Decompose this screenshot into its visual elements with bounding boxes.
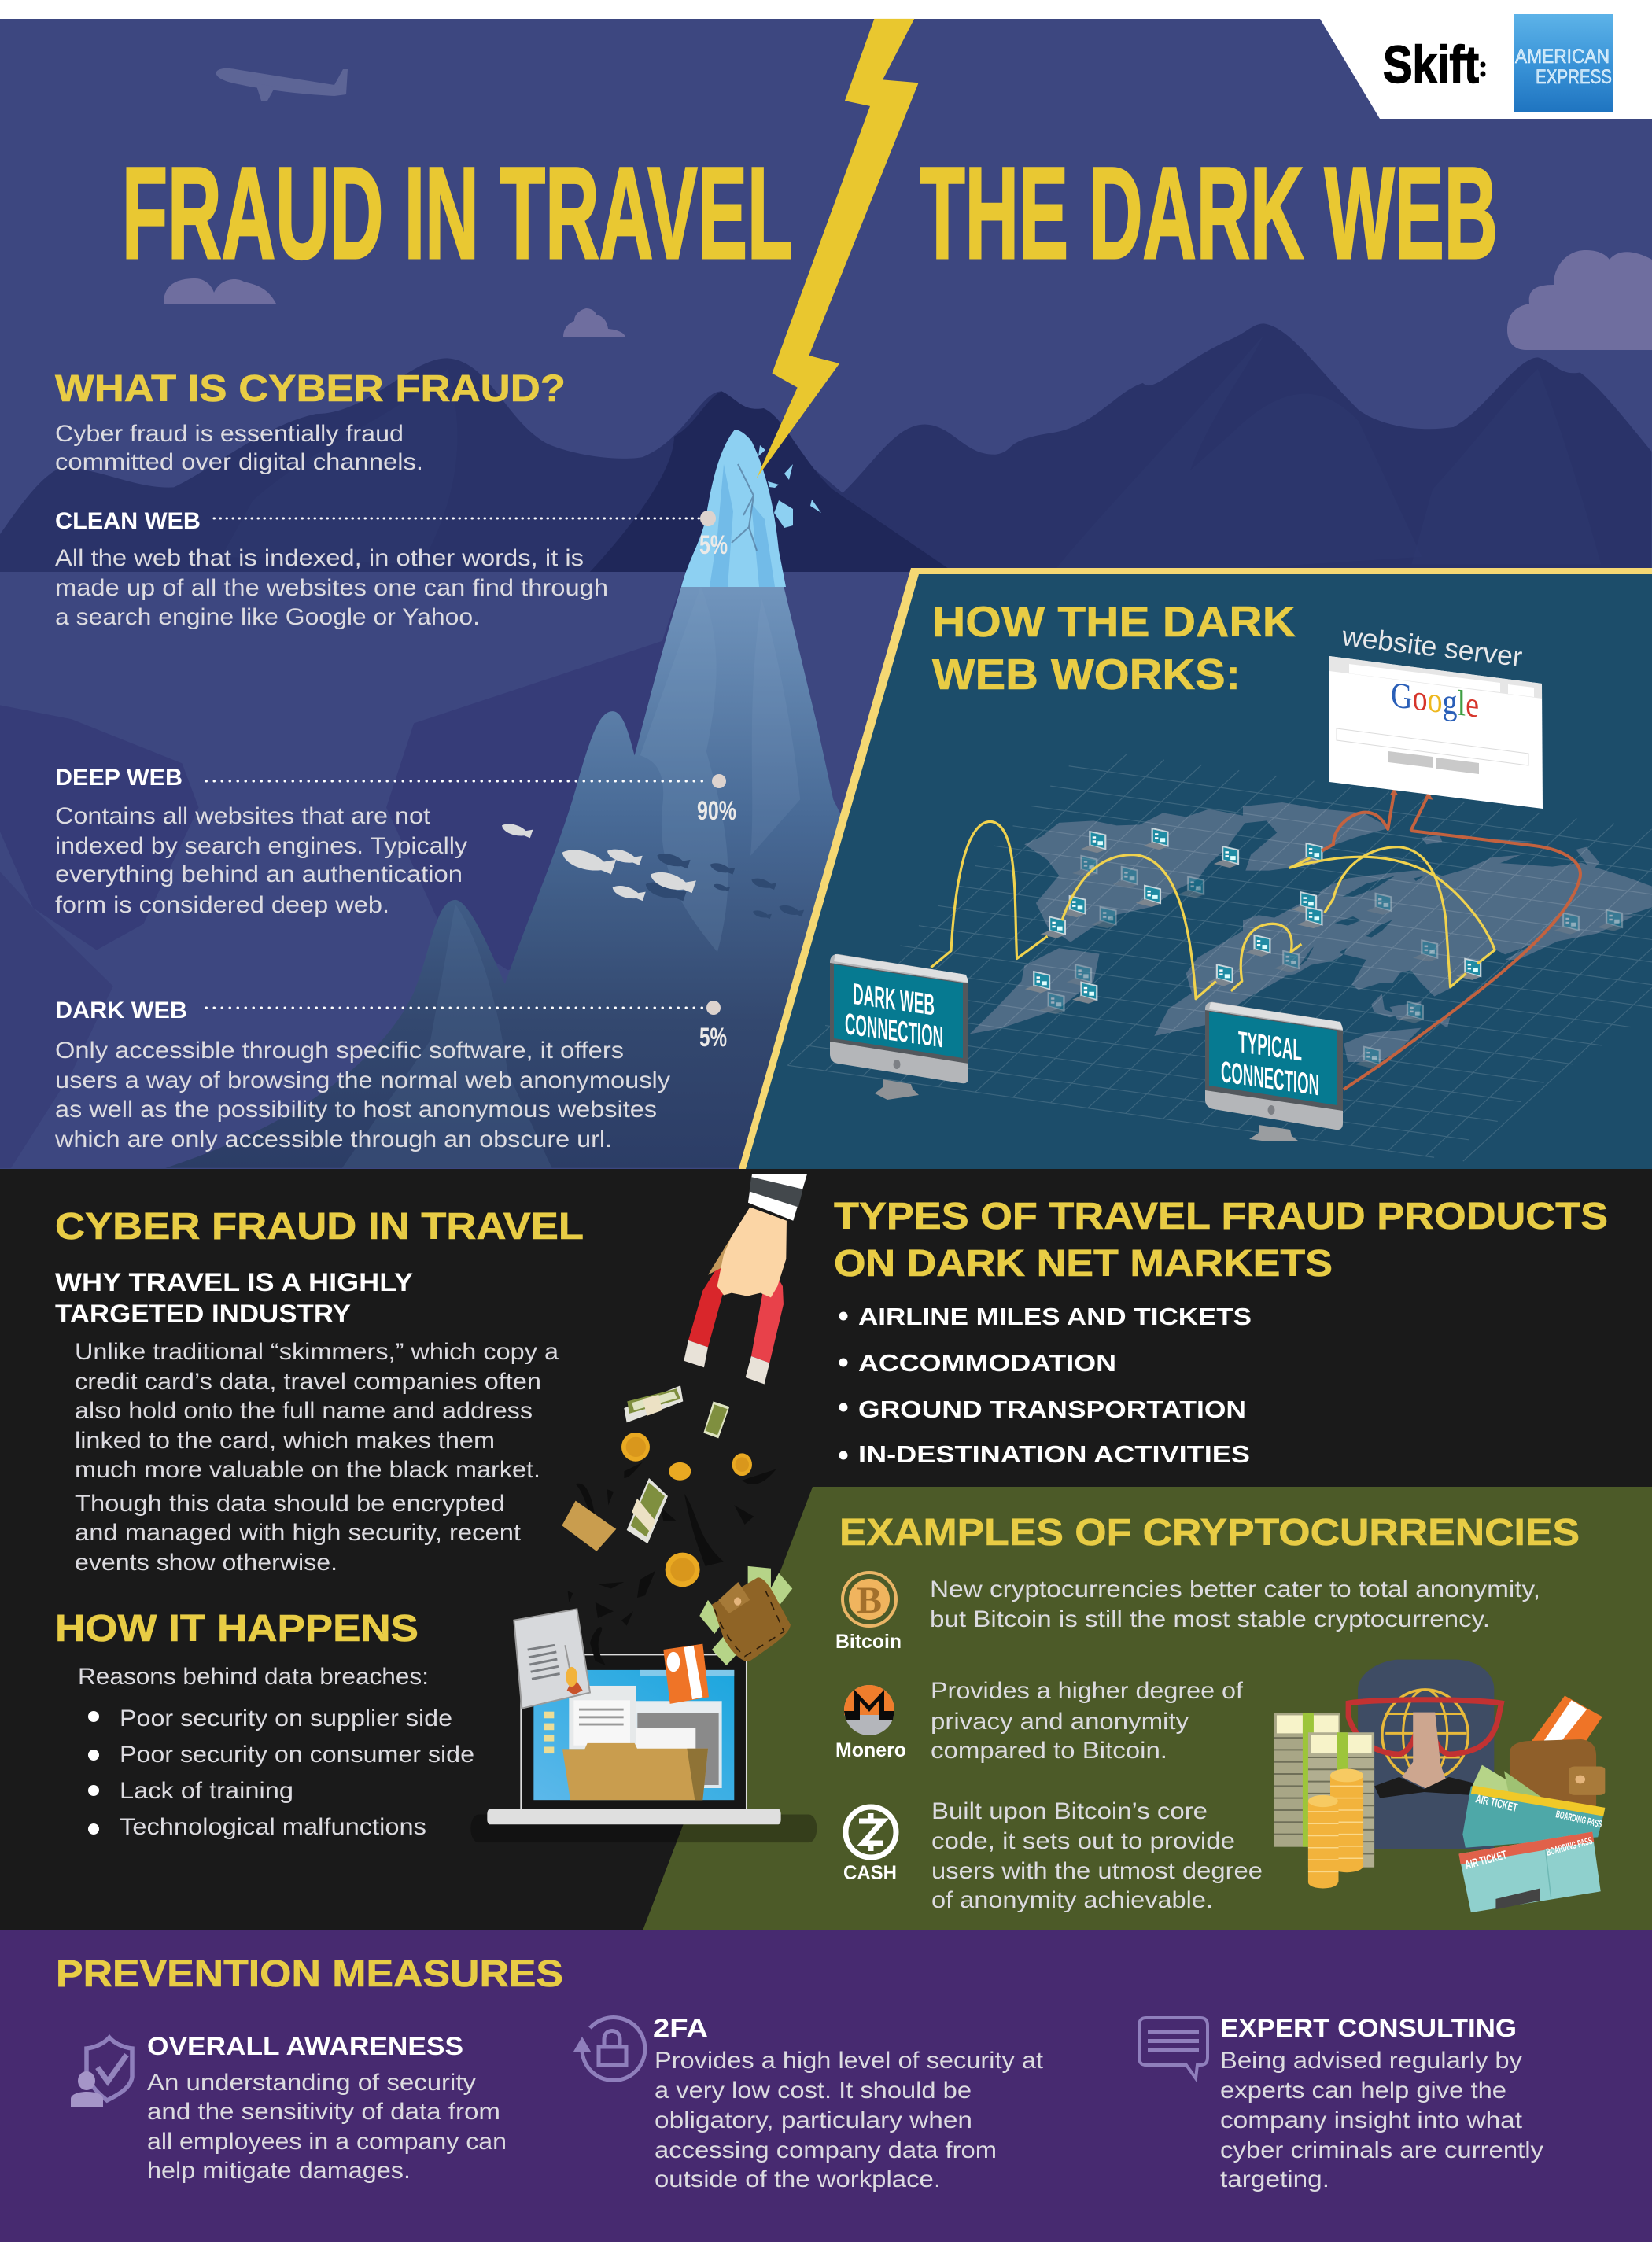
label: deep web xyxy=(55,765,736,826)
subheading: why travel is targeted: WHY TRAVEL IS A HIGHLY xyxy=(55,1268,413,1296)
text: expert consulting: EXPERT CONSULTING xyxy=(1220,2014,1517,2042)
title left: FRAUD IN TRAVEL xyxy=(122,141,793,286)
flying folder xyxy=(562,1501,616,1551)
background mountains xyxy=(0,323,1652,572)
text: clean web description xyxy=(55,545,608,630)
panel: black section xyxy=(0,1169,1652,1930)
list: breach reasons: Poor security on consumer side xyxy=(120,1742,474,1768)
text: zcash description xyxy=(931,1798,1263,1913)
logo: American Express: EXPRESS xyxy=(1536,66,1612,88)
text: clean web description: a search engine like Google or Yahoo. xyxy=(55,604,480,630)
text: why travel description: events show otherwise. xyxy=(75,1550,337,1576)
clouds xyxy=(164,250,1652,350)
text: definition: committed over digital channels. xyxy=(55,449,423,475)
text: monero description: compared to Bitcoin. xyxy=(931,1738,1167,1764)
logo dots xyxy=(1481,61,1485,77)
text: zcash description: Built upon Bitcoin’s core xyxy=(931,1798,1208,1824)
logo backing xyxy=(1320,19,1652,119)
text: dark web description: users a way of browsing the normal web anonymously xyxy=(55,1068,670,1093)
hand and magnet xyxy=(684,1174,807,1385)
icon: monero xyxy=(835,1685,906,1761)
monitor: typical connection: TYPICAL xyxy=(1238,1025,1302,1068)
text: monero description xyxy=(931,1678,1244,1764)
text: reasons intro: Reasons behind data breaches: xyxy=(78,1664,429,1690)
icon: shield and person xyxy=(71,2037,132,2107)
panel: green crypto section xyxy=(643,1487,1652,1930)
certificate xyxy=(514,1609,590,1709)
text: definition: Cyber fraud is essentially fraud xyxy=(55,421,404,447)
map node laptops xyxy=(1025,828,1623,1068)
icon: bitcoin: B xyxy=(857,1580,882,1621)
text: expert consulting: experts can help give the xyxy=(1220,2078,1506,2104)
text: bitcoin description: but Bitcoin is still the most stable cryptocurrency. xyxy=(930,1606,1490,1632)
falling debris xyxy=(568,1462,776,1665)
text: expert consulting: cyber criminals are currently xyxy=(1220,2137,1543,2163)
heading: how the dark web works xyxy=(932,597,1296,699)
wallet and card xyxy=(1471,1696,1605,1807)
text: 2FA: obligatory, particulary when xyxy=(655,2107,972,2133)
air tickets xyxy=(1458,1786,1605,1912)
text: dark web description: Only accessible through specific software, it offers xyxy=(55,1038,624,1064)
icon: bitcoin: Bitcoin xyxy=(835,1631,902,1653)
heading: how the dark web works: HOW THE DARK xyxy=(932,597,1296,646)
heading: types of fraud products xyxy=(834,1196,1608,1285)
text: monero description: privacy and anonymity xyxy=(931,1709,1189,1735)
icon: airplane xyxy=(216,68,348,101)
list: breach reasons: Poor security on supplier side xyxy=(120,1705,452,1731)
heading: examples of cryptocurrencies: EXAMPLES OF CRYPTOCURRENCIES xyxy=(839,1512,1580,1554)
ticket labels: BOARDING PASS xyxy=(1554,1808,1603,1830)
fish school xyxy=(502,824,804,919)
heading: how the dark web works: WEB WORKS: xyxy=(932,650,1241,699)
cash bundles xyxy=(624,1385,729,1543)
text: why travel description: linked to the card, which makes them xyxy=(75,1428,495,1454)
label: dark web: DARK WEB xyxy=(55,997,187,1023)
text: clean web description: made up of all the websites one can find through xyxy=(55,575,608,601)
iceberg under water xyxy=(165,586,865,1168)
text: overall awareness: An understanding of security xyxy=(147,2070,476,2096)
text: deep web description: form is considered deep web. xyxy=(55,892,389,918)
monitor: dark web connection xyxy=(830,954,968,1100)
laptop shadow xyxy=(470,1815,817,1842)
label: clean web xyxy=(55,508,728,560)
list: breach reasons: Technological malfunctions xyxy=(120,1814,426,1840)
monitor: dark web connection: DARK WEB xyxy=(853,977,935,1023)
wallet xyxy=(699,1566,792,1665)
text: overall awareness: all employees in a company can xyxy=(147,2129,507,2155)
text: 2FA: accessing company data from xyxy=(655,2137,997,2163)
text: why travel description: and managed with high security, recent xyxy=(75,1520,522,1546)
text: definition xyxy=(55,421,423,475)
text: dark web description: as well as the possibility to host anonymous websites xyxy=(55,1097,657,1123)
hacker xyxy=(1348,1660,1501,1849)
heading: cyber fraud in travel: CYBER FRAUD IN TRAVEL xyxy=(55,1206,584,1248)
subheading: why travel is targeted: TARGETED INDUSTRY xyxy=(55,1300,351,1328)
label: website server: website server xyxy=(1340,621,1524,673)
heading: how it happens: HOW IT HAPPENS xyxy=(55,1608,419,1650)
text: zcash description: users with the utmost degree xyxy=(931,1858,1263,1884)
text: why travel description: credit card’s data, travel companies often xyxy=(75,1369,541,1395)
text: expert consulting: Being advised regularly by xyxy=(1220,2048,1522,2074)
text: deep web description: everything behind an authentication xyxy=(55,861,463,887)
ticket labels: AIR TICKET xyxy=(1464,1848,1508,1872)
text: why travel description: Though this data should be encrypted xyxy=(75,1491,505,1517)
label: dark web xyxy=(55,997,727,1053)
cash stacks xyxy=(1274,1713,1374,1868)
icon: speech bubble xyxy=(1139,2018,1208,2078)
list: breach reasons xyxy=(88,1705,474,1840)
heading: types of fraud products: TYPES OF TRAVEL FRAUD PRODUCTS xyxy=(834,1196,1608,1237)
yellow dark web route arrows xyxy=(931,821,1495,999)
ticket labels: BOARDING PASS xyxy=(1545,1835,1594,1858)
lightning bolt xyxy=(756,19,919,478)
text: bitcoin description: New cryptocurrencies better cater to total anonymity, xyxy=(930,1576,1540,1602)
sky background xyxy=(0,0,1652,1169)
label: clean web: CLEAN WEB xyxy=(55,508,201,534)
text: expert consulting: company insight into what xyxy=(1220,2107,1523,2133)
underwater rock shapes xyxy=(0,575,684,1168)
heading: what is cyber fraud: WHAT IS CYBER FRAUD? xyxy=(55,368,566,410)
text: expert consulting: targeting. xyxy=(1220,2166,1329,2192)
panel: how the dark web works xyxy=(739,568,1652,1169)
world map continents xyxy=(969,802,1652,1062)
list: breach reasons: Lack of training xyxy=(120,1778,293,1804)
browser window xyxy=(1329,656,1543,809)
text: zcash description: code, it sets out to provide xyxy=(931,1828,1235,1854)
icon: monero: Monero xyxy=(835,1739,906,1761)
text: overall awareness: and the sensitivity of data from xyxy=(147,2099,500,2125)
label: dark web: 5% xyxy=(699,1023,727,1053)
text: overall awareness: OVERALL AWARENESS xyxy=(147,2032,463,2060)
coins xyxy=(621,1433,752,1587)
text: zcash description: of anonymity achievable. xyxy=(931,1887,1213,1913)
red typical route arrows xyxy=(1322,788,1580,1090)
subheading: why travel is targeted xyxy=(55,1268,413,1328)
iceberg tip above water xyxy=(681,430,786,587)
ticket labels xyxy=(1464,1792,1603,1872)
list: fraud products: ACCOMMODATION xyxy=(858,1349,1116,1377)
ticket labels: AIR TICKET xyxy=(1474,1792,1519,1815)
text: dark web description xyxy=(54,1038,670,1152)
icon: lock with refresh arrow xyxy=(577,2018,645,2081)
panel: prevention measures xyxy=(0,1930,1652,2242)
text: monero description: Provides a higher degree of xyxy=(931,1678,1244,1704)
browser window: Google xyxy=(1391,674,1479,725)
coin stacks xyxy=(1308,1769,1363,1888)
list: fraud products: GROUND TRANSPORTATION xyxy=(858,1396,1246,1423)
heading: types of fraud products: ON DARK NET MARKETS xyxy=(834,1243,1333,1285)
monitor: typical connection xyxy=(1205,1002,1343,1141)
text: deep web description xyxy=(55,803,467,918)
text: 2FA xyxy=(653,2014,1044,2192)
illustration: magnet, money and laptop xyxy=(470,1174,817,1842)
list: fraud products: IN-DESTINATION ACTIVITIES xyxy=(858,1440,1250,1468)
text: 2FA: Provides a high level of security at xyxy=(655,2048,1044,2074)
illustration: disguised hacker with cash and tickets xyxy=(1274,1660,1605,1912)
text: clean web description: All the web that is indexed, in other words, it is xyxy=(55,545,584,571)
text: why travel description: Unlike traditional “skimmers,” which copy a xyxy=(75,1339,559,1365)
label: clean web: 5% xyxy=(699,530,728,560)
list: fraud products xyxy=(839,1303,1252,1468)
text: expert consulting xyxy=(1220,2014,1543,2192)
text: overall awareness: help mitigate damages. xyxy=(147,2158,411,2184)
credit card xyxy=(663,1644,709,1704)
heading: prevention measures: PREVENTION MEASURES xyxy=(56,1953,563,1995)
label: deep web: 90% xyxy=(697,796,736,826)
text: bitcoin description xyxy=(930,1576,1540,1632)
icon: zcash xyxy=(843,1807,897,1884)
logo: American Express: AMERICAN xyxy=(1515,46,1610,68)
icon: zcash: CASH xyxy=(843,1862,897,1884)
monitor: dark web connection: CONNECTION xyxy=(845,1007,943,1055)
laptop xyxy=(487,1654,781,1824)
text: why travel description xyxy=(75,1339,559,1576)
world map grid xyxy=(787,754,1652,1161)
icon: bitcoin xyxy=(835,1573,902,1653)
top white band xyxy=(0,0,1652,19)
logo: American Express xyxy=(1514,14,1613,112)
text: overall awareness xyxy=(147,2032,507,2184)
text: 2FA: a very low cost. It should be xyxy=(655,2078,972,2104)
text: deep web description: indexed by search engines. Typically xyxy=(55,833,467,859)
list: fraud products: AIRLINE MILES AND TICKETS xyxy=(858,1303,1252,1330)
text: 2FA: 2FA xyxy=(653,2014,708,2042)
text: dark web description: which are only accessible through an obscure url. xyxy=(54,1127,612,1152)
logo: Skift: Skift xyxy=(1383,35,1479,94)
ice shards xyxy=(758,445,821,528)
text: deep web description: Contains all websites that are not xyxy=(55,803,431,829)
text: why travel description: much more valuable on the black market. xyxy=(75,1457,540,1483)
label: deep web: DEEP WEB xyxy=(55,765,183,791)
monitor: typical connection: CONNECTION xyxy=(1221,1055,1319,1103)
text: why travel description: also hold onto the full name and address xyxy=(75,1398,533,1424)
text: 2FA: outside of the workplace. xyxy=(655,2166,941,2192)
